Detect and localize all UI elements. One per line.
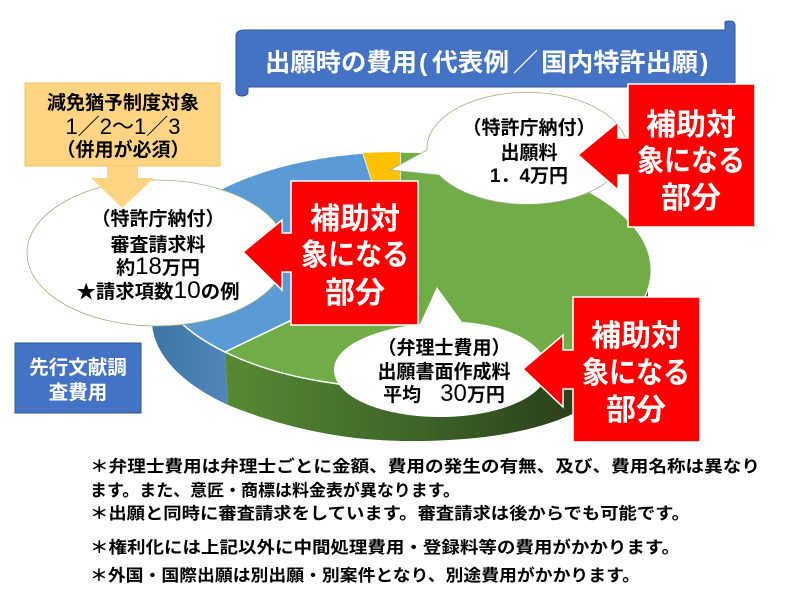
- prior art search label: 査費用: [49, 382, 107, 404]
- pie chart: [152, 152, 651, 441]
- title banner: ／: [513, 49, 538, 77]
- callout: application fee: （特許庁納付）: [462, 116, 596, 139]
- pie slice: yellow: [363, 152, 400, 268]
- callout: application fee: 出願料: [500, 142, 558, 164]
- subsidy box: examination fee: 補助対: [310, 203, 400, 236]
- subsidy box: examination fee: 象になる: [301, 239, 409, 272]
- title banner: 代表例: [432, 49, 509, 77]
- callout: attorney drafting fee: [334, 287, 547, 417]
- title banner: 出願時の費用: [265, 49, 417, 77]
- subsidy box: application fee: 補助対: [646, 109, 736, 142]
- subsidy box: attorney fee: 補助対: [591, 320, 681, 353]
- note box: fee reduction: [25, 83, 220, 166]
- callout: attorney drafting fee: 出願書面作成料: [377, 360, 511, 383]
- note box: fee reduction: （併用が必須）: [56, 138, 190, 161]
- footnotes: ます。また、意匠・商標は料金表が異なります。: [90, 480, 460, 500]
- subsidy box: examination fee: 部分: [325, 277, 385, 310]
- callout: application fee: [390, 92, 627, 204]
- title banner: 国内特許出願: [541, 49, 698, 77]
- title banner: (: [419, 49, 428, 77]
- pie slice: blue: [154, 153, 400, 352]
- note box: fee reduction: 減免猶予制度対象: [47, 91, 199, 114]
- callout: attorney drafting fee: （弁理士費用）: [377, 336, 511, 359]
- footnotes: ＊権利化には上記以外に中間処理費用・登録料等の費用がかかります。: [90, 537, 680, 557]
- prior art search label: 先行文献調: [29, 357, 127, 379]
- title banner: ): [700, 49, 708, 77]
- title banner: [236, 21, 735, 96]
- pie side: blue: [152, 270, 228, 405]
- callout: attorney drafting fee: 平均 30万円: [383, 380, 505, 407]
- callout: application fee: 1．4万円: [490, 166, 568, 187]
- subsidy box: attorney fee: [523, 297, 700, 442]
- footnotes: [90, 456, 760, 585]
- callout: examination request fee: ★請求項数10の例: [76, 277, 240, 304]
- subsidy box: examination fee: [243, 181, 418, 325]
- pie slice: green: [225, 152, 651, 388]
- callout: examination request fee: 約18万円: [116, 253, 200, 280]
- pie side: green: [225, 270, 648, 441]
- arrow: fee reduction down: [91, 166, 154, 208]
- footnotes: ＊外国・国際出願は別出願・別案件となり、別途費用がかかります。: [90, 565, 640, 585]
- note box: fee reduction: 1／2～1／3: [66, 114, 180, 139]
- subsidy box: attorney fee: 部分: [606, 394, 666, 427]
- prior art search label: [15, 343, 141, 413]
- callout: examination request fee: [27, 180, 287, 326]
- subsidy box: attorney fee: 象になる: [582, 357, 690, 390]
- callout: examination request fee: 審査請求料: [110, 233, 206, 256]
- subsidy box: application fee: 部分: [661, 182, 721, 215]
- subsidy box: application fee: [578, 84, 755, 227]
- callout: examination request fee: （特許庁納付）: [91, 207, 225, 230]
- footnotes: ＊弁理士費用は弁理士ごとに金額、費用の発生の有無、及び、費用名称は異なり: [90, 456, 760, 476]
- footnotes: ＊出願と同時に審査請求をしています。審査請求は後からでも可能です。: [90, 503, 690, 523]
- subsidy box: application fee: 象になる: [637, 145, 745, 178]
